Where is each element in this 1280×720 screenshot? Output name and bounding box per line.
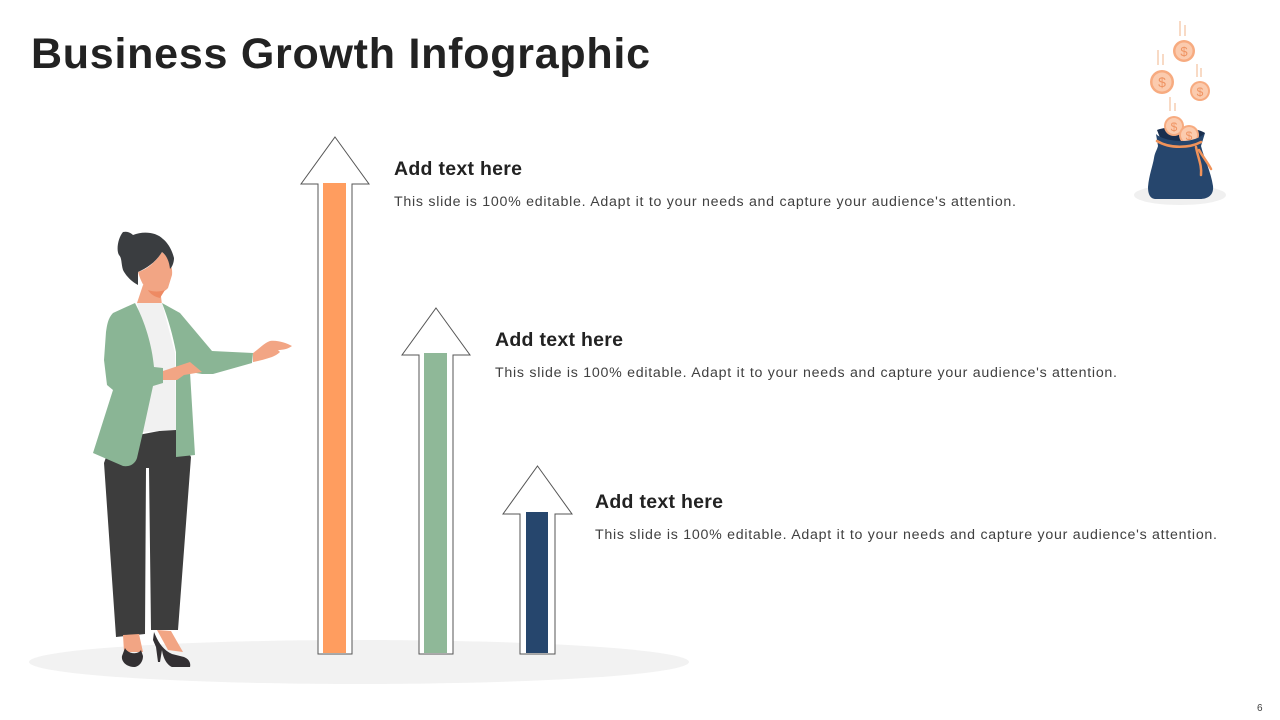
bag body [1148,133,1213,199]
ground shadow [29,640,689,684]
page number: 6 [1257,703,1263,714]
jacket right with arm [162,303,253,457]
text block 2 [495,329,1117,381]
coin 2 [1150,70,1174,94]
hair [118,232,174,285]
text block 1: Add text here [394,158,522,180]
text block 2: This slide is 100% editable. Adapt it to your needs and capture your audience's attention. [495,365,1117,381]
jacket left [93,303,163,466]
coin 4 [1164,116,1184,136]
left hand [163,362,202,380]
arrow: medium green [402,308,470,654]
arrow: short navy [503,466,572,654]
title: Business Growth Infographic [31,30,650,78]
coin 1: $ [1180,44,1188,59]
coin 5 [1179,125,1199,145]
illustration: businesswoman presenting [93,232,292,667]
drawstring [1157,141,1211,175]
coin 3 [1190,81,1210,101]
coin 2: $ [1158,74,1166,90]
text block 3: This slide is 100% editable. Adapt it to your needs and capture your audience's attention. [595,527,1217,543]
text block 2: Add text here [495,329,623,351]
shirt [137,303,176,432]
text block 1: This slide is 100% editable. Adapt it to your needs and capture your audience's attention. [394,194,1016,210]
coin 1 [1173,40,1195,62]
text block 1 [394,158,1016,210]
shoes [122,632,190,667]
coin 5: $ [1186,129,1193,143]
icon: money bag with falling coins [1134,21,1226,205]
feet [123,630,183,652]
text block 3: Add text here [595,491,723,513]
falling lines [1158,21,1201,111]
chin shadow [148,290,165,298]
arrow: tall orange [301,137,369,654]
bag shadow [1134,185,1226,205]
coin 4: $ [1171,120,1178,134]
bag back [1157,127,1205,143]
text block 3 [595,491,1217,543]
coin 3: $ [1197,85,1204,99]
right hand [253,341,292,362]
neck [137,285,162,325]
face [138,252,172,292]
trousers [104,428,191,637]
